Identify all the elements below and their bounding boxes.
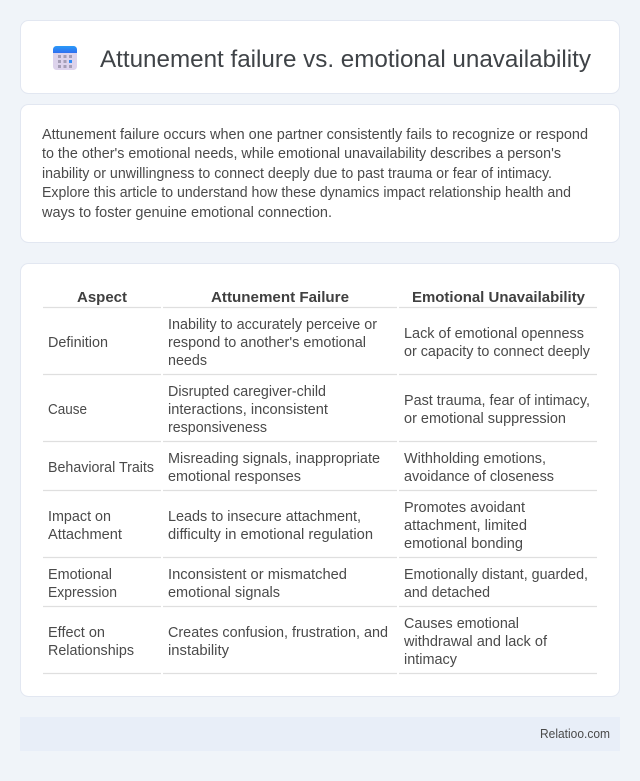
table header: Attunement Failure (211, 289, 349, 306)
row: impact on attachment: emotional bonding (404, 536, 523, 552)
row: behavioral traits (48, 451, 554, 485)
intro text: inability or unwillingness to connect deeply due to past trauma or fear of intimacy. (42, 166, 552, 182)
row: cause: Disrupted caregiver-child (168, 384, 326, 400)
row: emotional expression: and detached (404, 585, 490, 601)
row: emotional expression: emotional signals (168, 585, 280, 601)
icon: calendar (53, 46, 77, 70)
row: emotional expression (48, 567, 588, 601)
row: cause: responsiveness (168, 420, 267, 436)
row: effect on relationships: intimacy (404, 652, 458, 668)
table header (77, 289, 586, 306)
row: effect on relationships: Effect on (48, 625, 105, 641)
row: behavioral traits: Misreading signals, inappropriate (168, 451, 380, 467)
row: impact on attachment: difficulty in emotional regulation (168, 527, 373, 543)
row: impact on attachment: Leads to insecure attachment, (168, 509, 361, 525)
row: impact on attachment: Impact on (48, 509, 111, 525)
intro text (41, 127, 588, 221)
row: effect on relationships: Creates confusion, frustration, and (168, 625, 388, 641)
table header: Aspect (77, 289, 127, 306)
row: emotional expression: Inconsistent or mismatched (168, 567, 347, 583)
table header: Emotional Unavailability (412, 289, 586, 306)
row: cause: or emotional suppression (404, 411, 566, 427)
row: cause: Past trauma, fear of intimacy, (404, 393, 590, 409)
footer attribution: Relatioo.com (540, 727, 610, 741)
intro text: to the other's emotional needs, while emotional unavailability describes a person's (42, 146, 561, 162)
panel: header (20, 20, 620, 94)
row: impact on attachment: attachment, limited (404, 518, 527, 534)
row: emotional expression: Emotional (48, 567, 112, 583)
row dividers (43, 308, 597, 674)
row: effect on relationships: withdrawal and lack of (403, 634, 547, 650)
row: effect on relationships: Relationships (48, 643, 134, 659)
row: definition: respond to another's emotional (168, 335, 366, 351)
row: impact on attachment: Attachment (48, 527, 122, 543)
intro text: Attunement failure occurs when one partner consistently fails to recognize or respond (42, 127, 588, 143)
row: effect on relationships: Causes emotional (404, 616, 519, 632)
intro text: ways to foster genuine emotional connection. (41, 205, 332, 221)
panel: introduction (20, 104, 620, 242)
row: behavioral traits: Withholding emotions, (404, 451, 546, 467)
row: definition (48, 317, 591, 369)
row: cause (48, 384, 590, 436)
row: emotional expression: Emotionally distant, guarded, (404, 567, 588, 583)
row: cause: interactions, inconsistent (168, 402, 328, 418)
row: behavioral traits: Behavioral Traits (48, 460, 154, 476)
row: effect on relationships: instability (168, 643, 230, 659)
title: Attunement failure vs. emotional unavailability (100, 46, 591, 73)
row: impact on attachment: Promotes avoidant (404, 500, 525, 516)
intro text: Explore this article to understand how these dynamics impact relationship health and (42, 185, 571, 201)
row: behavioral traits: avoidance of closeness (404, 469, 554, 485)
row: impact on attachment (48, 500, 527, 552)
row: definition: or capacity to connect deeply (404, 344, 591, 360)
row: emotional expression: Expression (48, 585, 117, 601)
row: definition: needs (168, 353, 207, 369)
row: definition: Lack of emotional openness (404, 326, 584, 342)
row: effect on relationships (48, 616, 547, 668)
panel: comparison table (20, 264, 620, 696)
row: cause: Cause (48, 402, 87, 418)
footer (20, 717, 620, 751)
row: behavioral traits: emotional responses (168, 469, 301, 485)
row: definition: Inability to accurately perceive or (168, 317, 377, 333)
row: definition: Definition (48, 335, 108, 351)
